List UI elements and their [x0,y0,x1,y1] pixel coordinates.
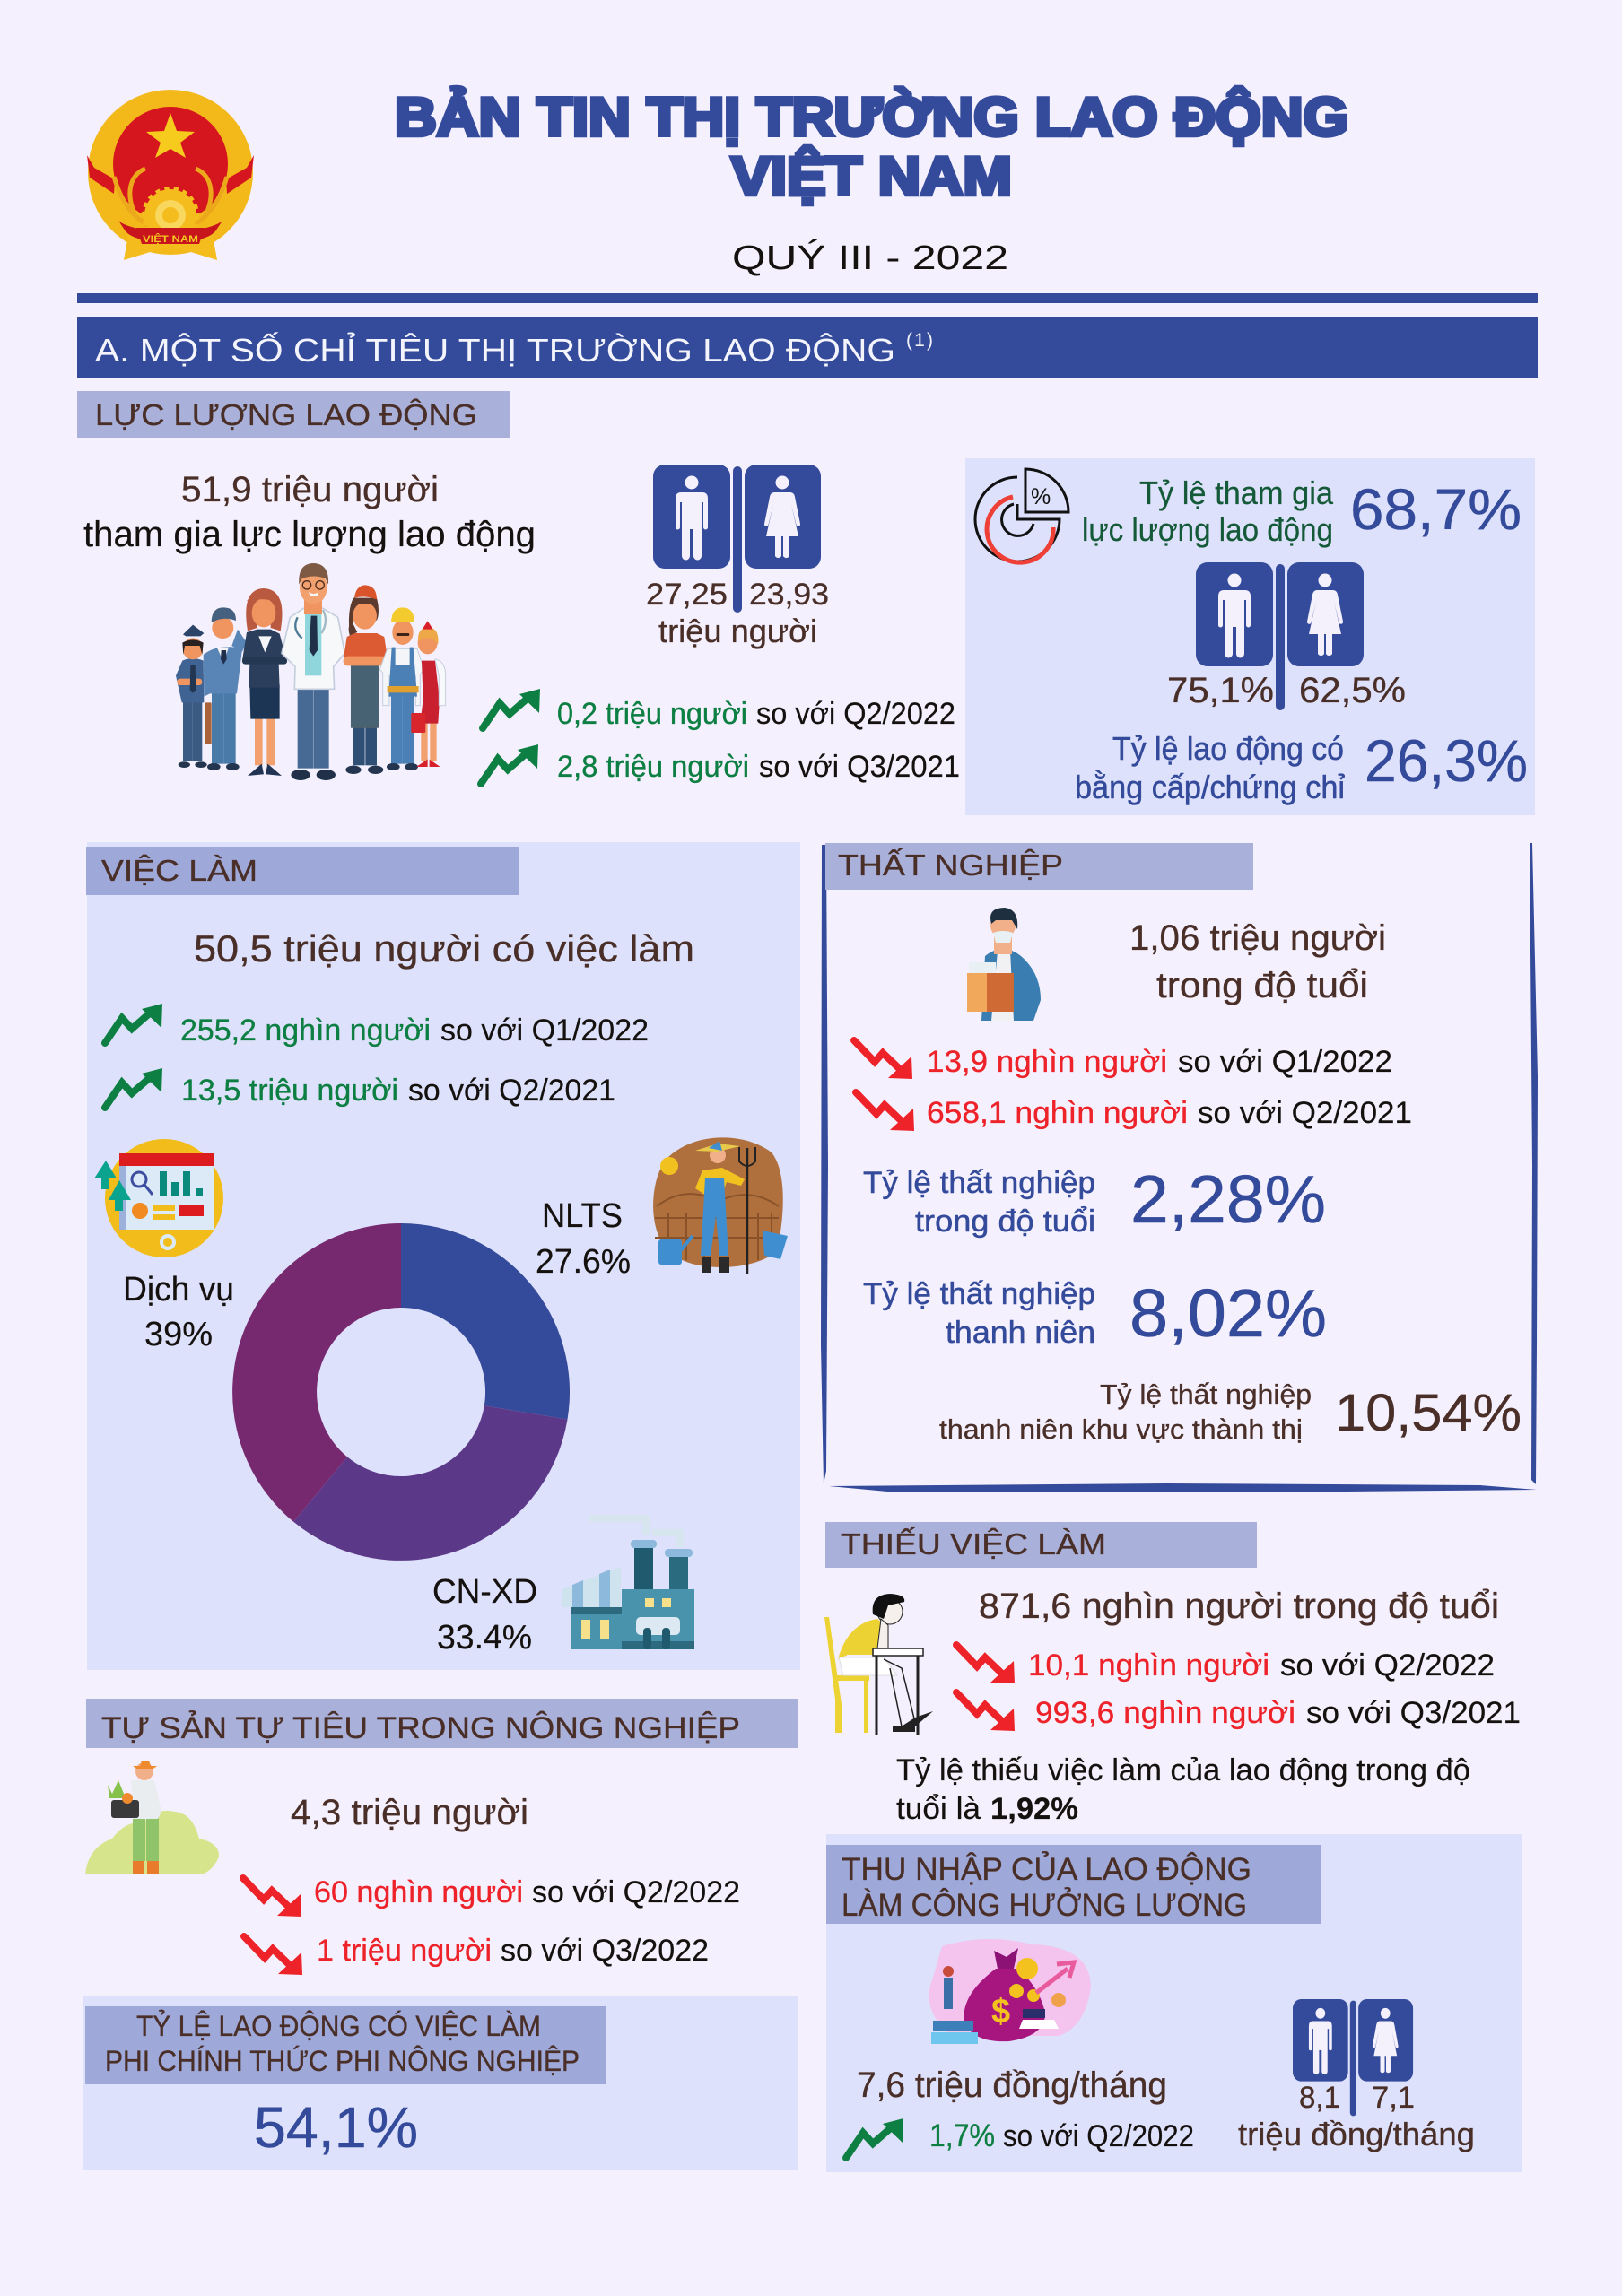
heading: income [826,1845,1321,1924]
worker: businessman [204,607,247,770]
icon: gender split income [1293,1999,1413,2116]
text: quarter change [557,697,955,731]
icon: pie chart [975,469,1068,562]
arrow: underemployment down 2 [956,1692,1015,1731]
icon: farmer with basket [85,1761,219,1874]
heading: income: LÀM CÔNG HƯỞNG LƯƠNG [842,1887,1247,1923]
text: youth rate label [863,1277,1095,1350]
text: underemployment rate: Tỷ lệ thiếu việc làm của lao động trong độ [896,1753,1470,1787]
arrow: subsistence down [243,1878,301,1917]
worker: doctor [282,563,344,780]
text: employment quarter change: so với Q1/2022 [440,1013,649,1048]
text: employment year change [181,1074,615,1108]
heading: underemployment: THIẾU VIỆC LÀM [841,1527,1106,1561]
title: BẢN TIN THỊ TRƯỜNG LAO ĐỘNG [395,87,1348,147]
frame: hand-drawn border [821,843,1538,1492]
text: labor force by gender: triệu người [658,613,817,649]
section: underemployment [824,1522,1521,1826]
heading: employment: VIỆC LÀM [101,854,257,887]
text: participation rate label [1082,474,1334,548]
icon: masked worker with box [967,908,1041,1021]
heading: income: THU NHẬP CỦA LAO ĐỘNG [842,1851,1251,1887]
text: underemployment rate: tuổi là [896,1792,981,1826]
text: underemployment year change: so với Q3/2021 [1306,1696,1521,1730]
text: income by gender: 7,1 [1372,2081,1415,2115]
text: participation by gender: 62,5% [1299,671,1406,710]
arrow: up 2 [481,744,538,784]
icon: gender split labor force [653,465,821,613]
section heading A: A. MỘT SỐ CHỈ TIÊU THỊ TRƯỜNG LAO ĐỘNG [95,331,895,369]
label: CN-XD: 33.4% [437,1619,532,1657]
heading: labor force [77,391,510,438]
label: NLTS [536,1197,631,1281]
text: employment year change: 13,5 triệu người [181,1074,398,1108]
worker: businesswoman [242,588,287,776]
text: underemployed total: 871,6 nghìn người trong độ tuổi [979,1587,1499,1626]
icon: farmer [653,1137,788,1274]
arrow: employment up [105,1004,162,1043]
text: subsistence year change: 1 triệu người [317,1934,492,1968]
arrow: income up [846,2118,903,2158]
text: labor force total: 51,9 triệu người [181,470,439,509]
text: underemployment year change [1035,1696,1521,1730]
text: subsistence quarter change: 60 nghìn người [314,1875,523,1909]
section: subsistence agriculture [85,1699,798,1975]
text: quarter change: 0,2 triệu người [557,697,747,731]
text: unemployment quarter change: 13,9 nghìn người [927,1045,1167,1079]
text: participation rate value: 68,7% [1350,477,1522,542]
text: subsistence quarter change [314,1875,740,1909]
text: income by gender: 8,1 [1299,2081,1340,2115]
title [395,87,1348,206]
title: VIỆT NAM [731,146,1012,206]
icon: pie chart: % [1031,484,1051,509]
icon: money bag: $ [991,1993,1010,2031]
arrow: up [483,689,540,728]
heading: subsistence agriculture: TỰ SẢN TỰ TIÊU TRONG NÔNG NGHIỆP [101,1711,740,1745]
worker: police [176,625,207,768]
heading: labor force: LỰC LƯỢNG LAO ĐỘNG [95,398,477,431]
heading: unemployment: THẤT NGHIỆP [838,848,1063,882]
arrow: unemployment down 2 [856,1092,914,1131]
text: certificate rate value: 26,3% [1365,727,1528,794]
text: subsistence year change [317,1934,709,1968]
label: CN-XD [432,1573,537,1657]
text: year change: so với Q3/2021 [759,750,960,784]
text: certificate rate label: Tỷ lệ lao động có [1112,730,1344,767]
text: subsistence year change: so với Q3/2022 [501,1934,709,1968]
text: average income: 7,6 triệu đồng/tháng [857,2066,1167,2105]
text: underemployment quarter change: so với Q2/2022 [1280,1648,1495,1683]
heading: unemployment [825,843,1253,890]
segment: Dịch vụ [232,1223,401,1522]
section heading A [77,317,1538,378]
label: Dịch vụ [123,1271,234,1353]
label: CN-XD: CN-XD [432,1573,537,1611]
heading: informal employment: PHI CHÍNH THỨC PHI NÔNG NGHIỆP [105,2045,580,2077]
text: year change [557,750,960,784]
icon: group of workers [176,563,446,780]
heading: employment [86,847,519,895]
labor force changes [481,689,960,784]
text: participation by gender [1167,671,1406,710]
text: youth rate label: thanh niên [946,1316,1095,1350]
worker: stewardess [411,621,446,767]
text: certificate rate label [1075,730,1345,805]
segment: CN-XD [293,1405,567,1561]
text: subsistence total: 4,3 triệu người [291,1793,528,1832]
text: income change: 1,7% [929,2118,995,2153]
heading: subsistence agriculture [86,1699,798,1748]
text: labor force by gender: 27,25 [646,578,728,612]
text: labor force by gender [646,578,829,649]
text: quarter change: so với Q2/2022 [756,697,955,731]
heading: underemployment [825,1522,1257,1568]
text: employment quarter change [180,1013,649,1048]
donut chart: employment by sector [232,1223,570,1561]
icon: services dashboard [94,1139,223,1257]
label: NLTS: NLTS [542,1197,623,1235]
text: unemployment quarter change [927,1045,1392,1079]
text: unemployed total: trong độ tuổi [1156,966,1368,1005]
text: year change: 2,8 triệu người [557,750,749,784]
arrow: underemployment down [956,1645,1015,1683]
text: labor force total: tham gia lực lượng lao động [83,515,536,554]
text: unemployed total [1129,918,1386,1005]
text: informal rate value: 54,1% [254,2095,418,2160]
heading: informal employment: TỶ LỆ LAO ĐỘNG CÓ VIỆC LÀM [136,2010,541,2042]
text: participation by gender: 75,1% [1167,671,1274,710]
heading: informal employment [85,2006,606,2084]
text: labor force by gender: 23,93 [749,578,829,612]
text: working age rate label: Tỷ lệ thất nghiệp [863,1166,1095,1200]
text: income change: so với Q2/2022 [1003,2119,1194,2153]
worker: waitress [344,585,388,774]
icon: gender split participation [1196,562,1364,710]
text: urban youth rate label: thanh niên khu vực thành thị [939,1413,1303,1445]
text: underemployment rate: 1,92% [990,1792,1078,1826]
text: youth rate value: 8,02% [1129,1275,1327,1351]
text: unemployment quarter change: so với Q1/2022 [1178,1045,1392,1079]
text: urban youth rate label: Tỷ lệ thất nghiệp [1100,1378,1312,1410]
text: unemployment year change [927,1096,1412,1130]
text: income by gender: triệu đồng/tháng [1238,2116,1475,2152]
text: employed total: 50,5 triệu người có việc làm [194,927,694,970]
text: participation rate label: lực lượng lao động [1082,511,1333,548]
panel: informal employment [83,1996,798,2170]
text: urban youth rate label [939,1378,1312,1445]
text: subsistence quarter change: so với Q2/2022 [532,1875,740,1909]
arrow: subsistence down 2 [244,1936,302,1975]
text: unemployment year change: so với Q2/2021 [1198,1096,1412,1130]
icon: factory [562,1518,694,1649]
text: unemployment year change: 658,1 nghìn người [927,1096,1188,1130]
text: labor force total [83,470,536,554]
panel: unemployment [821,843,1538,1492]
worker: mechanic [379,607,424,770]
text: income by gender [1238,2081,1475,2152]
segment: NLTS [401,1223,570,1420]
subtitle: QUÝ III - 2022 [732,239,1008,277]
text: underemployment year change: 993,6 nghìn người [1035,1696,1295,1730]
text: working age rate label [863,1166,1095,1239]
panel: participation rate [965,458,1535,815]
label: NLTS: 27.6% [536,1243,631,1281]
text: participation rate label: Tỷ lệ tham gia [1139,474,1334,511]
icon: worried man at desk [824,1594,933,1735]
icon: money bag [929,1939,1091,2044]
panel: income [826,1834,1522,2172]
panel: employment [86,842,800,1670]
text: urban youth rate value: 10,54% [1335,1384,1522,1442]
icon: national emblem [87,90,254,260]
text: youth rate label: Tỷ lệ thất nghiệp [863,1277,1095,1311]
icon: national emblem: VIỆT NAM [143,233,198,245]
text: certificate rate label: bằng cấp/chứng chỉ [1075,769,1345,805]
text: underemployment quarter change [1028,1648,1495,1683]
text: working age rate label: trong độ tuổi [915,1205,1095,1239]
text: underemployment rate [896,1753,1470,1826]
text: underemployment quarter change: 10,1 nghìn người [1028,1648,1269,1683]
text: unemployed total: 1,06 triệu người [1129,918,1386,958]
text: income change [929,2118,1194,2153]
label: Dịch vụ: Dịch vụ [123,1271,234,1309]
arrow: unemployment down [854,1040,912,1079]
arrow: employment up 2 [105,1068,162,1108]
text: working age rate value: 2,28% [1130,1161,1326,1237]
text: employment quarter change: 255,2 nghìn người [180,1013,431,1048]
section heading A: (1) [906,330,933,351]
text: employment year change: so với Q2/2021 [408,1074,615,1108]
label: Dịch vụ: 39% [144,1316,213,1353]
